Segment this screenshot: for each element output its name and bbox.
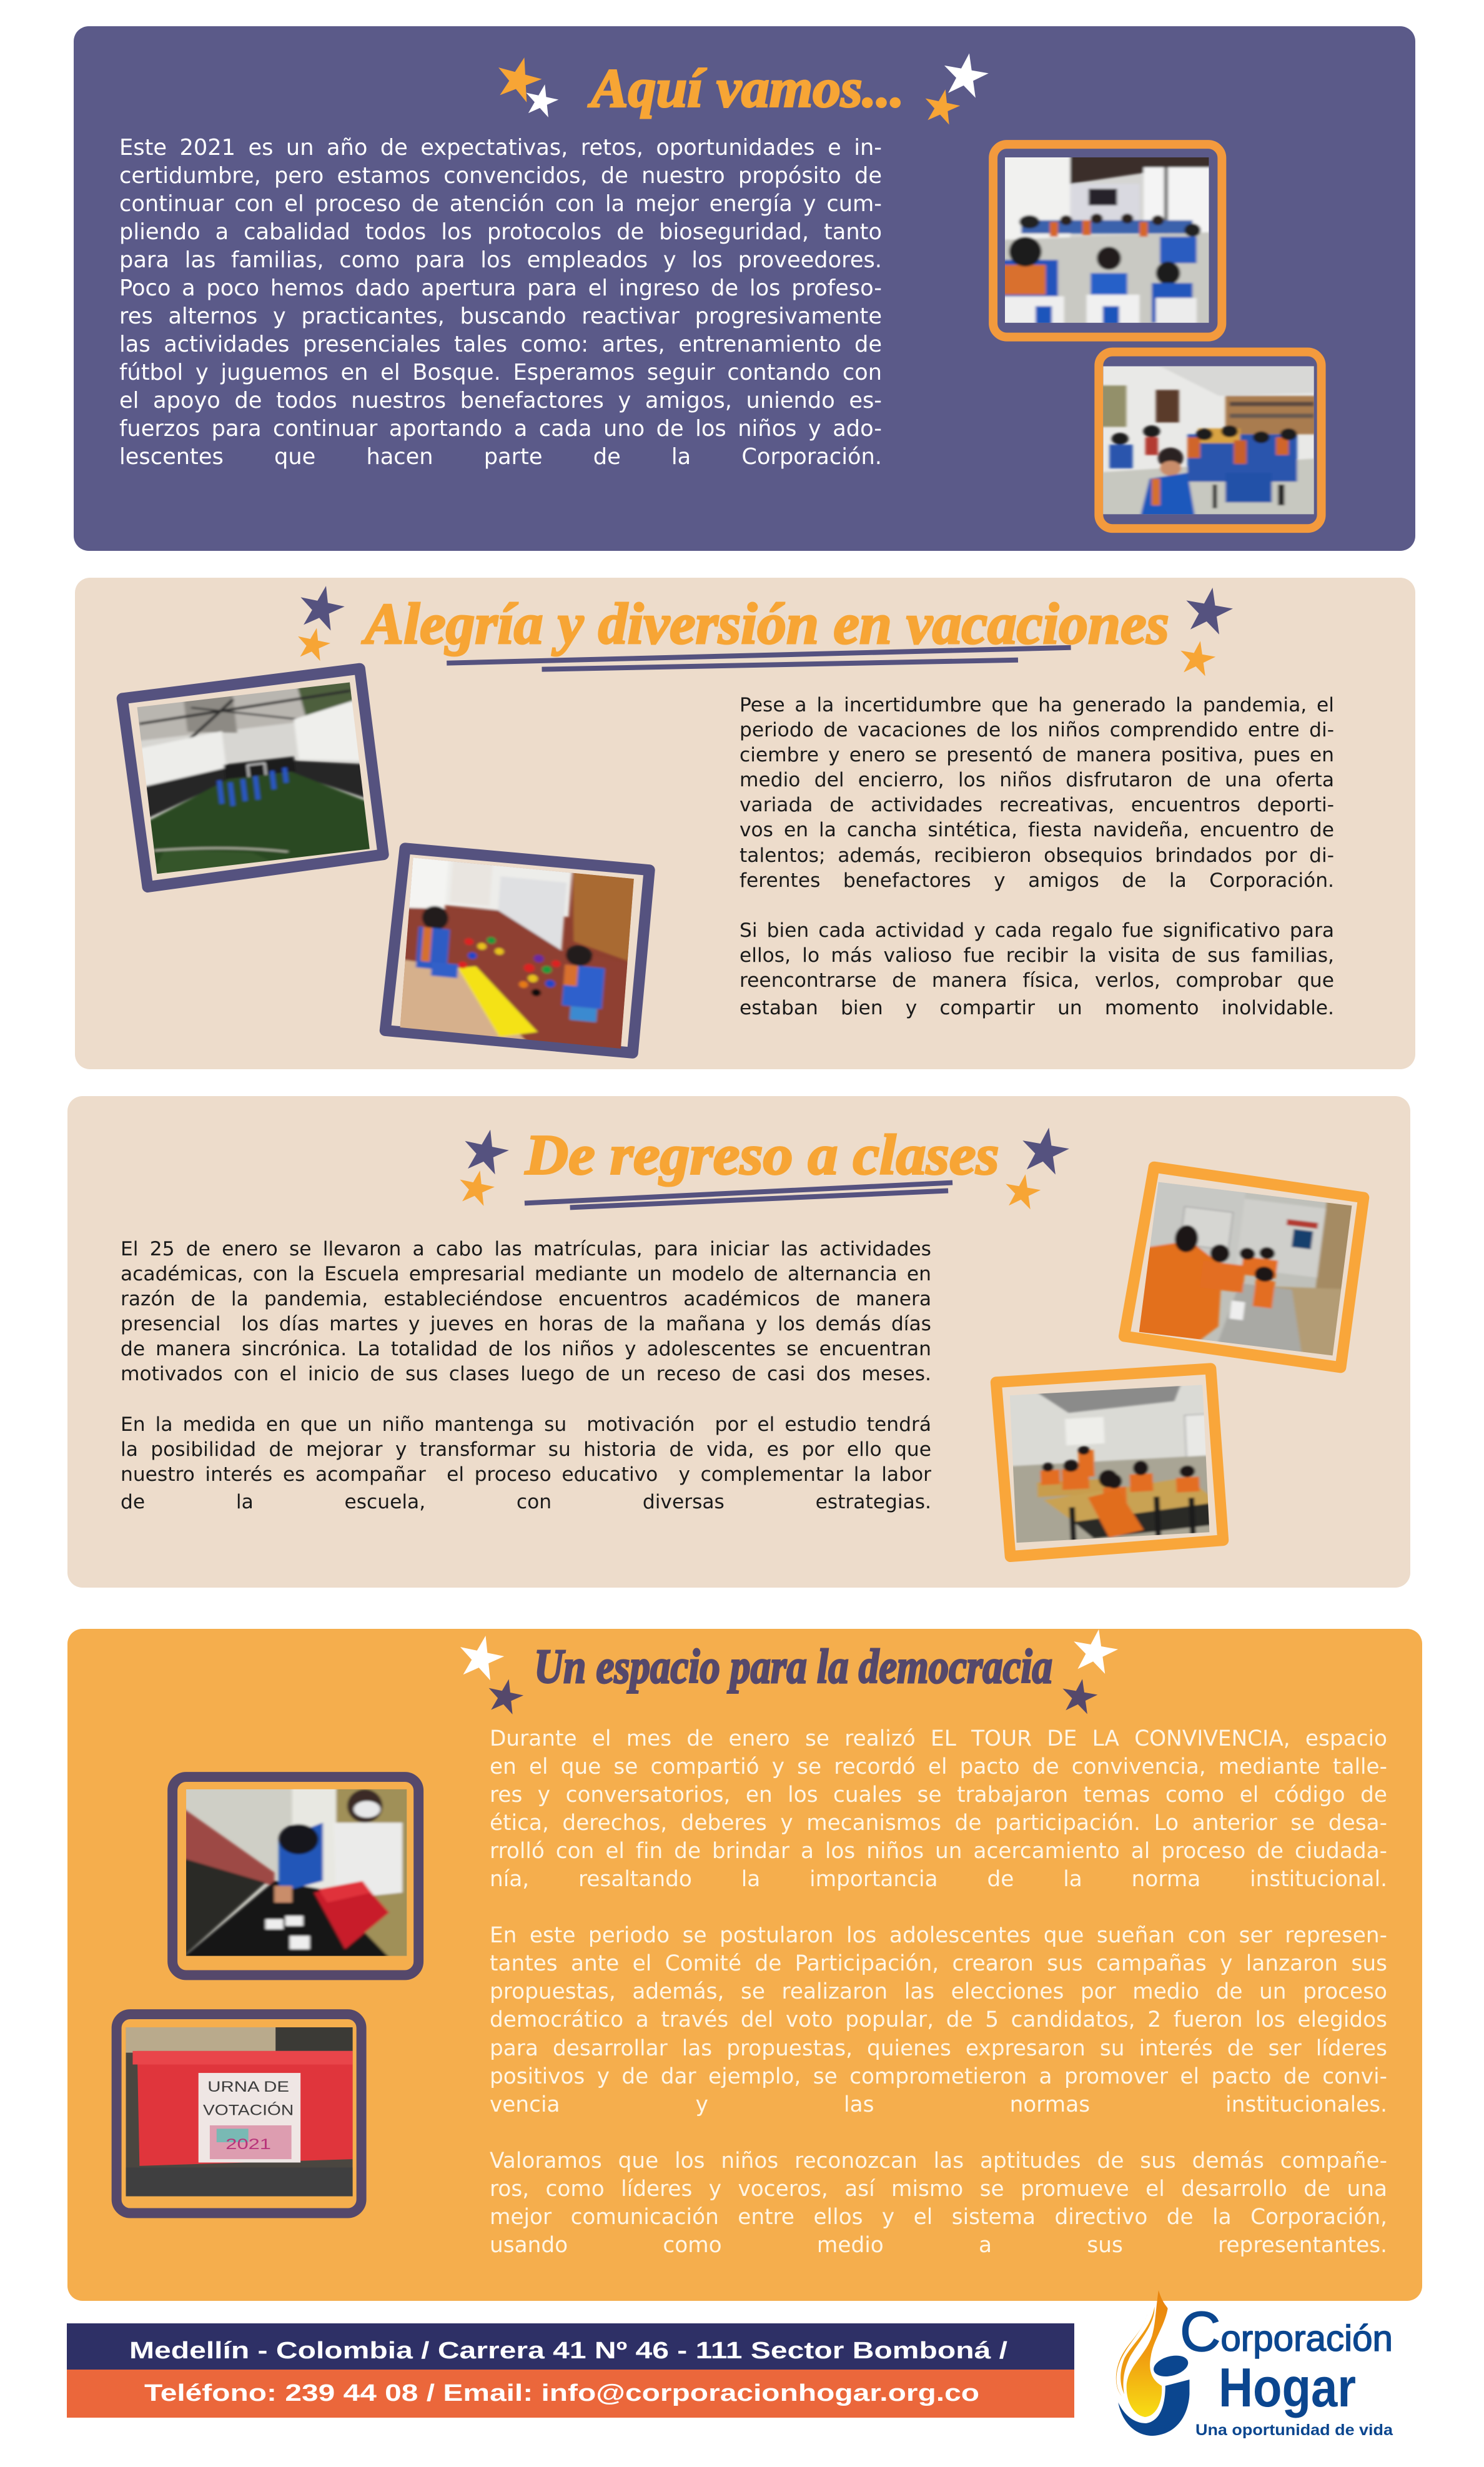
text block: Durante el mes de enero: propuestas, además, se realizaron las elecciones por medio de un proceso [490, 1979, 1387, 2004]
text block: Este 2021: res alternos y practicantes, buscando reactivar progresivamente [119, 304, 882, 329]
text block: El 25 de enero [121, 1238, 931, 1513]
text block: Pese a la incertidumbre [740, 694, 1334, 1019]
text block: Pese a la incertidumbre: periodo de vacaciones de los niños comprendido entre di- [740, 719, 1334, 741]
logo wordmark: Una oportunidad de vida [1195, 2421, 1393, 2439]
text block: Pese a la incertidumbre: reencontrarse de manera física, verlos, comprobar que [740, 969, 1334, 992]
heading: De regreso a clases [455, 1123, 1072, 1210]
text block: Este 2021 [119, 135, 882, 470]
text block: Pese a la incertidumbre: Pese a la incertidumbre que ha generado la pandemia, el [740, 694, 1334, 716]
text block: Este 2021: fuerzos para continuar aportando a cada uno de los niños y ado- [119, 416, 882, 442]
text block: Este 2021: fútbol y juguemos en el Bosque. Esperamos seguir contando con [119, 360, 882, 385]
text block: Este 2021: certidumbre, pero estamos convencidos, de nuestro propósito de [119, 163, 882, 189]
panel: Aquí vamos [74, 26, 1415, 551]
text block: Pese a la incertidumbre: estaban bien y compartir un momento inolvidable. [740, 997, 1334, 1019]
text block: El 25 de enero: nuestro interés es acompañar el proceso educativo y complementar la labor [121, 1463, 931, 1486]
text block: Pese a la incertidumbre: vos en la cancha sintética, fiesta navideña, encuentro de [740, 819, 1334, 841]
address bar [67, 2323, 1074, 2370]
text block: Durante el mes de enero: para desarrollar las propuestas, quienes expresaron su interés de ser líderes [490, 2036, 1387, 2061]
heading: Aquí vamos [492, 49, 991, 126]
text block: Este 2021: pliendo a cabalidad todos los protocolos de bioseguridad, tanto [119, 219, 882, 245]
heading: Alegría y diversión en vacaciones [294, 581, 1236, 677]
text block: Durante el mes de enero: positivos y de dar ejemplo, se comprometieron a promover el pacto de convi- [490, 2064, 1387, 2089]
contact bar: Teléfono: 239 44 08 / Email: info@corporacionhogar.org.co [144, 2380, 979, 2406]
text block: Durante el mes de enero: Durante el mes de enero se realizó EL TOUR DE LA CONVIVENCIA, espacio [490, 1726, 1387, 1751]
logo wordmark: Corporación [1180, 2301, 1393, 2363]
text block: Durante el mes de enero: usando como medio a sus representantes. [490, 2233, 1387, 2258]
photo: votación en escalera [172, 1777, 418, 1975]
text block: Pese a la incertidumbre: medio del encierro, los niños disfrutaron de una oferta [740, 769, 1334, 791]
text block: Durante el mes de enero: En este periodo se postularon los adolescentes que sueñan con ser represen- [490, 1923, 1387, 1948]
text block: Durante el mes de enero: ética, derechos, deberes y mecanismos de participación. Lo anterior se desa- [490, 1811, 1387, 1836]
address bar: Medellín - Colombia / Carrera 41 Nº 46 - 111 Sector Bomboná / [129, 2338, 1008, 2364]
text block: Durante el mes de enero: rrolló con el fin de brindar a los niños un acercamiento al proceso de ciudada- [490, 1839, 1387, 1864]
footer: dirección y contacto [67, 2323, 1074, 2418]
contact bar [67, 2370, 1074, 2418]
text block: Durante el mes de enero: vencia y las normas institucionales. [490, 2092, 1387, 2117]
heading: Un espacio para la democracia: Un espacio para la democracia [534, 1639, 1052, 1693]
text block: Este 2021: continuar con el proceso de atención con la mejor energía y cum- [119, 191, 882, 217]
text block: Pese a la incertidumbre: variada de actividades recreativas, encuentros deporti- [740, 794, 1334, 816]
photo: urna de votación [117, 2014, 362, 2213]
panel: Alegría y diversión en vacaciones [75, 578, 1415, 1069]
text block: Este 2021: el apoyo de todos nuestros benefactores y amigos, uniendo es- [119, 388, 882, 413]
text block: Este 2021: Poco a poco hemos dado apertura para el ingreso de los profeso- [119, 275, 882, 301]
photo: urna de votación: URNA DE [207, 2079, 289, 2095]
text block: Durante el mes de enero: Valoramos que los niños reconozcan las aptitudes de sus demás compañe- [490, 2148, 1387, 2173]
text block: Durante el mes de enero: ros, como líderes y voceros, así mismo se promueve el desarrollo de una [490, 2177, 1387, 2202]
text block: Durante el mes de enero: en el que se compartió y se recordó el pacto de convivencia, mediante talle- [490, 1754, 1387, 1779]
heading: Un espacio para la democracia [455, 1626, 1121, 1716]
text block: Pese a la incertidumbre: talentos; además, recibieron obsequios brindados por di- [740, 844, 1334, 867]
logo flame mark [1116, 2290, 1192, 2436]
text block: El 25 de enero: El 25 de enero se llevaron a cabo las matrículas, para iniciar las actividades [121, 1238, 931, 1260]
photo: niños en círculo [993, 144, 1222, 337]
text block: El 25 de enero: de manera sincrónica. La totalidad de los niños y adolescentes se encuentran [121, 1338, 931, 1360]
photo: estudiantes en mesa [1124, 1167, 1363, 1367]
heading: Alegría y diversión en vacaciones: Alegría y diversión en vacaciones [362, 592, 1169, 656]
photo: cancha sintética [122, 669, 383, 887]
text block: Pese a la incertidumbre: ciembre y enero se presentó de manera positiva, pues en [740, 744, 1334, 766]
photo: niños con juguetes [385, 848, 650, 1058]
heading: De regreso a clases: De regreso a clases [525, 1123, 999, 1187]
text block: Pese a la incertidumbre: ellos, lo más valioso fue recibir la visita de sus familias, [740, 944, 1334, 967]
text block: Durante el mes de enero [490, 1726, 1387, 2258]
text block: El 25 de enero: académicas, con la Escuela empresarial mediante un modelo de alternancia en [121, 1263, 931, 1285]
text block: Pese a la incertidumbre: ferentes benefactores y amigos de la Corporación. [740, 869, 1334, 892]
text block: Durante el mes de enero: mejor comunicación entre ellos y el sistema directivo de la Corporación, [490, 2205, 1387, 2230]
logo: Corporación Hogar [1115, 2290, 1393, 2439]
text block: El 25 de enero: la posibilidad de mejorar y transformar su historia de vida, es por ello que [121, 1438, 931, 1461]
text block: Durante el mes de enero: nía, resaltando la importancia de la norma institucional. [490, 1867, 1387, 1892]
photo: salón de clases [996, 1368, 1223, 1556]
text block: Durante el mes de enero: res y conversatorios, en los cuales se trabajaron temas como el código de [490, 1782, 1387, 1807]
heading: Aquí vamos: Aquí vamos... [588, 57, 904, 118]
photo: urna de votación: 2021 [225, 2136, 271, 2153]
text block: El 25 de enero: razón de la pandemia, estableciéndose encuentros académicos de manera [121, 1288, 931, 1310]
text block: Durante el mes de enero: democrático a través del voto popular, de 5 candidatos, 2 fueron los elegidos [490, 2007, 1387, 2032]
text block: Este 2021: lescentes que hacen parte de la Corporación. [119, 444, 882, 470]
text block: Este 2021: Este 2021 es un año de expectativas, retos, oportunidades e in- [119, 135, 882, 160]
text block: Este 2021: las actividades presenciales tales como: artes, entrenamiento de [119, 332, 882, 357]
photo: niños en biblioteca [1092, 352, 1325, 528]
text block: Durante el mes de enero: tantes ante el Comité de Participación, crearon sus campañas y lanzaron sus [490, 1951, 1387, 1976]
text block: Este 2021: para las familias, como para los empleados y los proveedores. [119, 247, 882, 273]
text block: El 25 de enero: de la escuela, con diversas estrategias. [121, 1491, 931, 1513]
text block: El 25 de enero: presencial los días martes y jueves en horas de la mañana y los demás días [121, 1313, 931, 1335]
logo wordmark: Hogar [1219, 2356, 1356, 2418]
photo: urna de votación: VOTACIÓN [203, 2102, 294, 2119]
panel: Un espacio para la democracia [67, 1629, 1422, 2301]
panel: De regreso a clases [67, 1096, 1410, 1588]
logo wordmark [1180, 2301, 1393, 2439]
text block: El 25 de enero: motivados con el inicio de sus clases luego de un receso de casi dos meses. [121, 1363, 931, 1385]
text block: Pese a la incertidumbre: Si bien cada actividad y cada regalo fue significativo para [740, 919, 1334, 942]
text block: El 25 de enero: En la medida en que un niño mantenga su motivación por el estudio tendrá [121, 1413, 931, 1436]
